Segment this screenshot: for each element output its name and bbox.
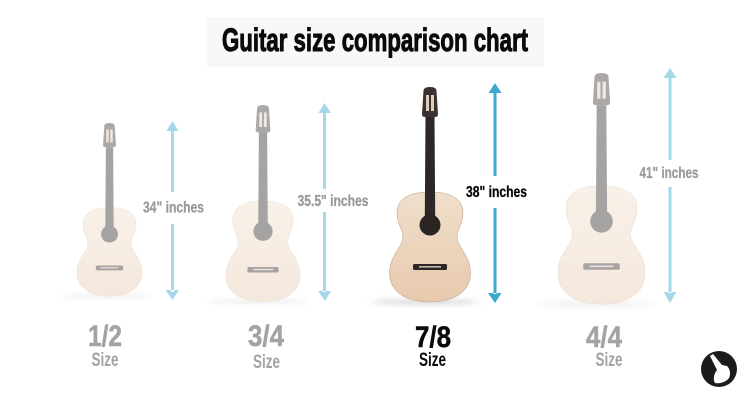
arrow: 38 inches [488,83,502,303]
label: 1/2 size [88,320,122,371]
label: 7/8 size [415,321,451,371]
label: 4/4 size [586,321,622,371]
title [207,17,544,67]
arrow: 35.5 inches [318,103,331,301]
bridge [413,264,447,270]
label: 3/4 size [248,320,284,373]
guitar: 4/4 size [537,73,655,306]
label: 1/2 size: Size [92,350,118,371]
label: 3/4 size: Size [253,352,280,373]
measure: 41 inches: 41" inches [640,165,699,182]
icon: guitar logo [701,351,737,387]
title: Guitar size comparison chart [222,22,528,58]
sound hole [420,214,440,236]
measure: 35.5 inches: 35.5" inches [298,193,369,210]
guitar: 1/2 size [61,123,150,298]
measure: 38 inches: 38" inches [466,184,527,201]
arrow: 34 inches [166,121,179,300]
guitar: 7/8 size [370,87,480,304]
label: 3/4 size: 3/4 [248,320,284,353]
guitar body [390,192,470,302]
measure: 34 inches: 34" inches [143,200,204,216]
arrow: 41 inches [664,68,676,303]
label: 4/4 size: Size [596,350,622,371]
label: 1/2 size: 1/2 [88,320,122,353]
guitar headstock [422,87,438,117]
headstock slots [426,95,434,111]
label: 4/4 size: 4/4 [586,321,622,354]
label: 7/8 size: 7/8 [415,321,451,354]
label: 7/8 size: Size [419,350,446,371]
guitar neck [425,117,435,217]
guitar: 3/4 size [208,105,309,304]
